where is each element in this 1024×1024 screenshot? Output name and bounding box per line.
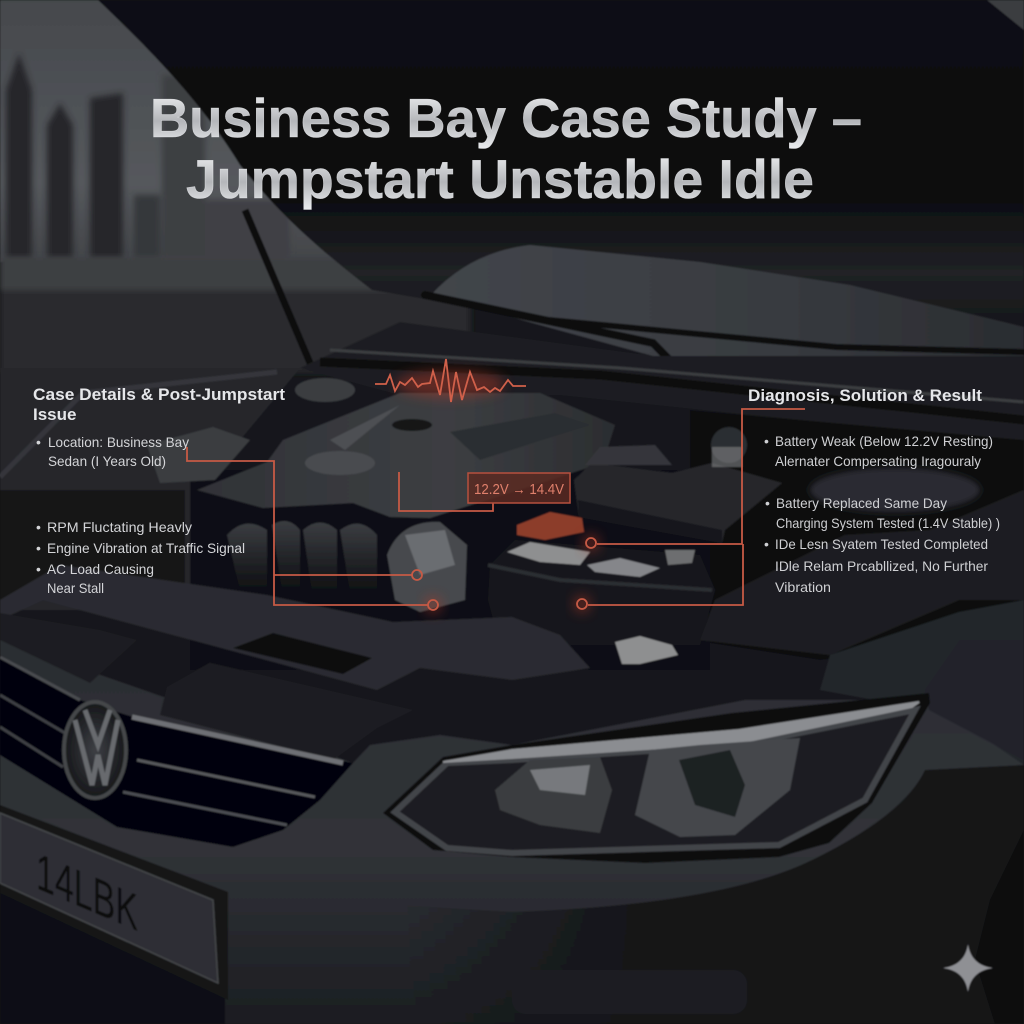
central bay: [190, 470, 710, 670]
lower dark fender shadow: [400, 765, 1024, 1024]
left bullets: •: [36, 519, 41, 535]
right bullets: Battery Replaced Same Day: [776, 495, 947, 511]
throttle body: [387, 522, 467, 612]
left bullets: Engine Vibration at Traffic Signal: [47, 540, 245, 556]
left heading: Issue: [33, 405, 76, 424]
red glows: [395, 370, 600, 614]
bumper: [0, 640, 1024, 1024]
left bullets: [36, 434, 245, 596]
plate frame: [0, 805, 228, 1000]
battery: [488, 540, 715, 645]
tyre arch: [975, 830, 1024, 1024]
hood corner: [987, 0, 1024, 30]
reservoir: [147, 427, 250, 483]
engine cover: [197, 393, 615, 518]
title: [150, 87, 862, 210]
left heading: [33, 385, 285, 424]
air box: [574, 427, 782, 543]
title: Business Bay Case Study –: [150, 87, 862, 149]
right bullets: Battery Weak (Below 12.2V Resting): [775, 433, 993, 449]
hood seal: [829, 600, 1024, 660]
left bullets: Sedan (I Years Old): [48, 453, 166, 469]
background: city sky: [0, 0, 470, 262]
right bullets: IDle Relam Prcabllized, No Further: [775, 558, 988, 574]
left heading: Case Details & Post-Jumpstart: [33, 385, 285, 404]
grille brackets: [0, 613, 137, 683]
title: Jumpstart Unstable Idle: [186, 148, 814, 210]
red relay box: [517, 512, 584, 540]
fender: [800, 600, 1024, 1024]
cross beam: [377, 668, 760, 740]
corner star: [943, 944, 993, 992]
cowl panel: [300, 322, 1024, 440]
left bay overlay: [0, 368, 300, 610]
red connector lines: [187, 409, 805, 610]
hood underside: [98, 0, 1024, 335]
left bullets: RPM Fluctating Heavly: [47, 519, 192, 535]
right bullets: Alernater Compersating Iragouraly: [775, 453, 981, 469]
skyline silhouettes: [6, 53, 290, 258]
left bullets: AC Load Causing: [47, 561, 154, 577]
right heading: Diagnosis, Solution & Result: [748, 386, 982, 405]
slam panel: [0, 565, 590, 690]
left bullets: Near Stall: [47, 580, 104, 596]
right panel: diagnosis: [748, 386, 1000, 595]
fog panel: [512, 970, 747, 1014]
hood strut: [245, 210, 313, 370]
windshield: [431, 245, 1024, 356]
road: [0, 258, 470, 372]
right panels: [700, 490, 1024, 655]
fender highlight: [925, 640, 1024, 760]
intake manifold runners: [227, 521, 377, 592]
right bullets: [764, 433, 1000, 595]
voltage callout: [468, 473, 570, 503]
reflection in right bay: [810, 468, 980, 512]
right bay: [690, 410, 1024, 660]
right bullets: Vibration: [775, 579, 831, 595]
lower grille: [0, 875, 225, 1024]
license plate: 14LBK: [36, 841, 138, 943]
right bullets: •: [764, 433, 769, 449]
strut tower: [295, 378, 355, 402]
right bullets: •: [765, 495, 770, 511]
right bullets: •: [764, 536, 769, 552]
voltage callout: 12.2V → 14.4V: [474, 481, 564, 498]
headlight: [383, 693, 930, 863]
left panel: case details: [33, 385, 285, 596]
right bullets: Charging System Tested (1.4V Stable) ): [776, 515, 1000, 531]
left bullets: •: [36, 434, 41, 450]
badge: [64, 702, 126, 798]
left bullets: •: [36, 561, 41, 577]
red ECG waveform: [375, 359, 526, 402]
right bullets: IDe Lesn Syatem Tested Completed: [775, 536, 988, 552]
left bullets: Location: Business Bay: [48, 434, 189, 450]
license plate: [0, 813, 218, 983]
grille: [0, 655, 353, 847]
washer bottle: [615, 636, 678, 664]
wipers: [425, 295, 1024, 383]
left bullets: •: [36, 540, 41, 556]
